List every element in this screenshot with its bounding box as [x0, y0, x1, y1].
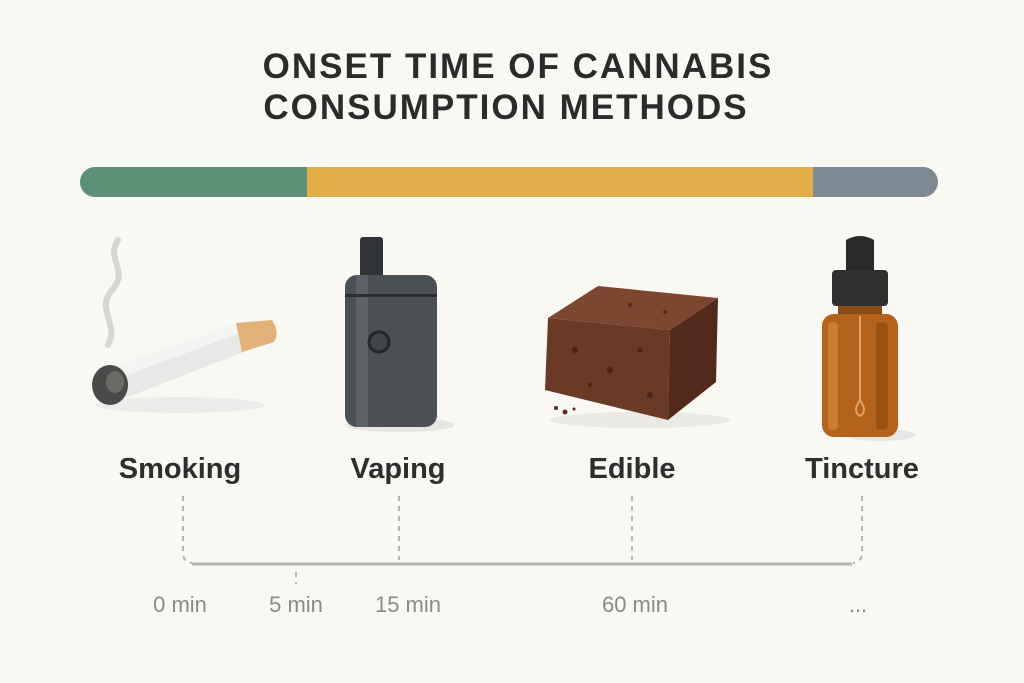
title	[263, 47, 773, 127]
timeline axis	[183, 496, 862, 584]
icon: tincture	[822, 236, 915, 441]
time labels	[153, 592, 867, 617]
color bar	[80, 167, 938, 197]
title: ONSET TIME OF CANNABIS	[263, 47, 773, 86]
method labels	[119, 453, 919, 485]
method labels: Vaping	[350, 453, 446, 485]
method labels: Smoking	[119, 453, 241, 485]
time labels: 60 min	[602, 592, 668, 617]
method labels: Edible	[588, 453, 676, 485]
time labels: ...	[849, 592, 867, 617]
time labels: 0 min	[153, 592, 207, 617]
time labels: 15 min	[375, 592, 441, 617]
title: CONSUMPTION METHODS	[263, 88, 749, 127]
icon: brownie	[545, 286, 730, 428]
icon: vape	[345, 237, 455, 432]
method labels: Tincture	[805, 453, 919, 485]
icon: joint	[92, 240, 277, 413]
time labels: 5 min	[269, 592, 323, 617]
